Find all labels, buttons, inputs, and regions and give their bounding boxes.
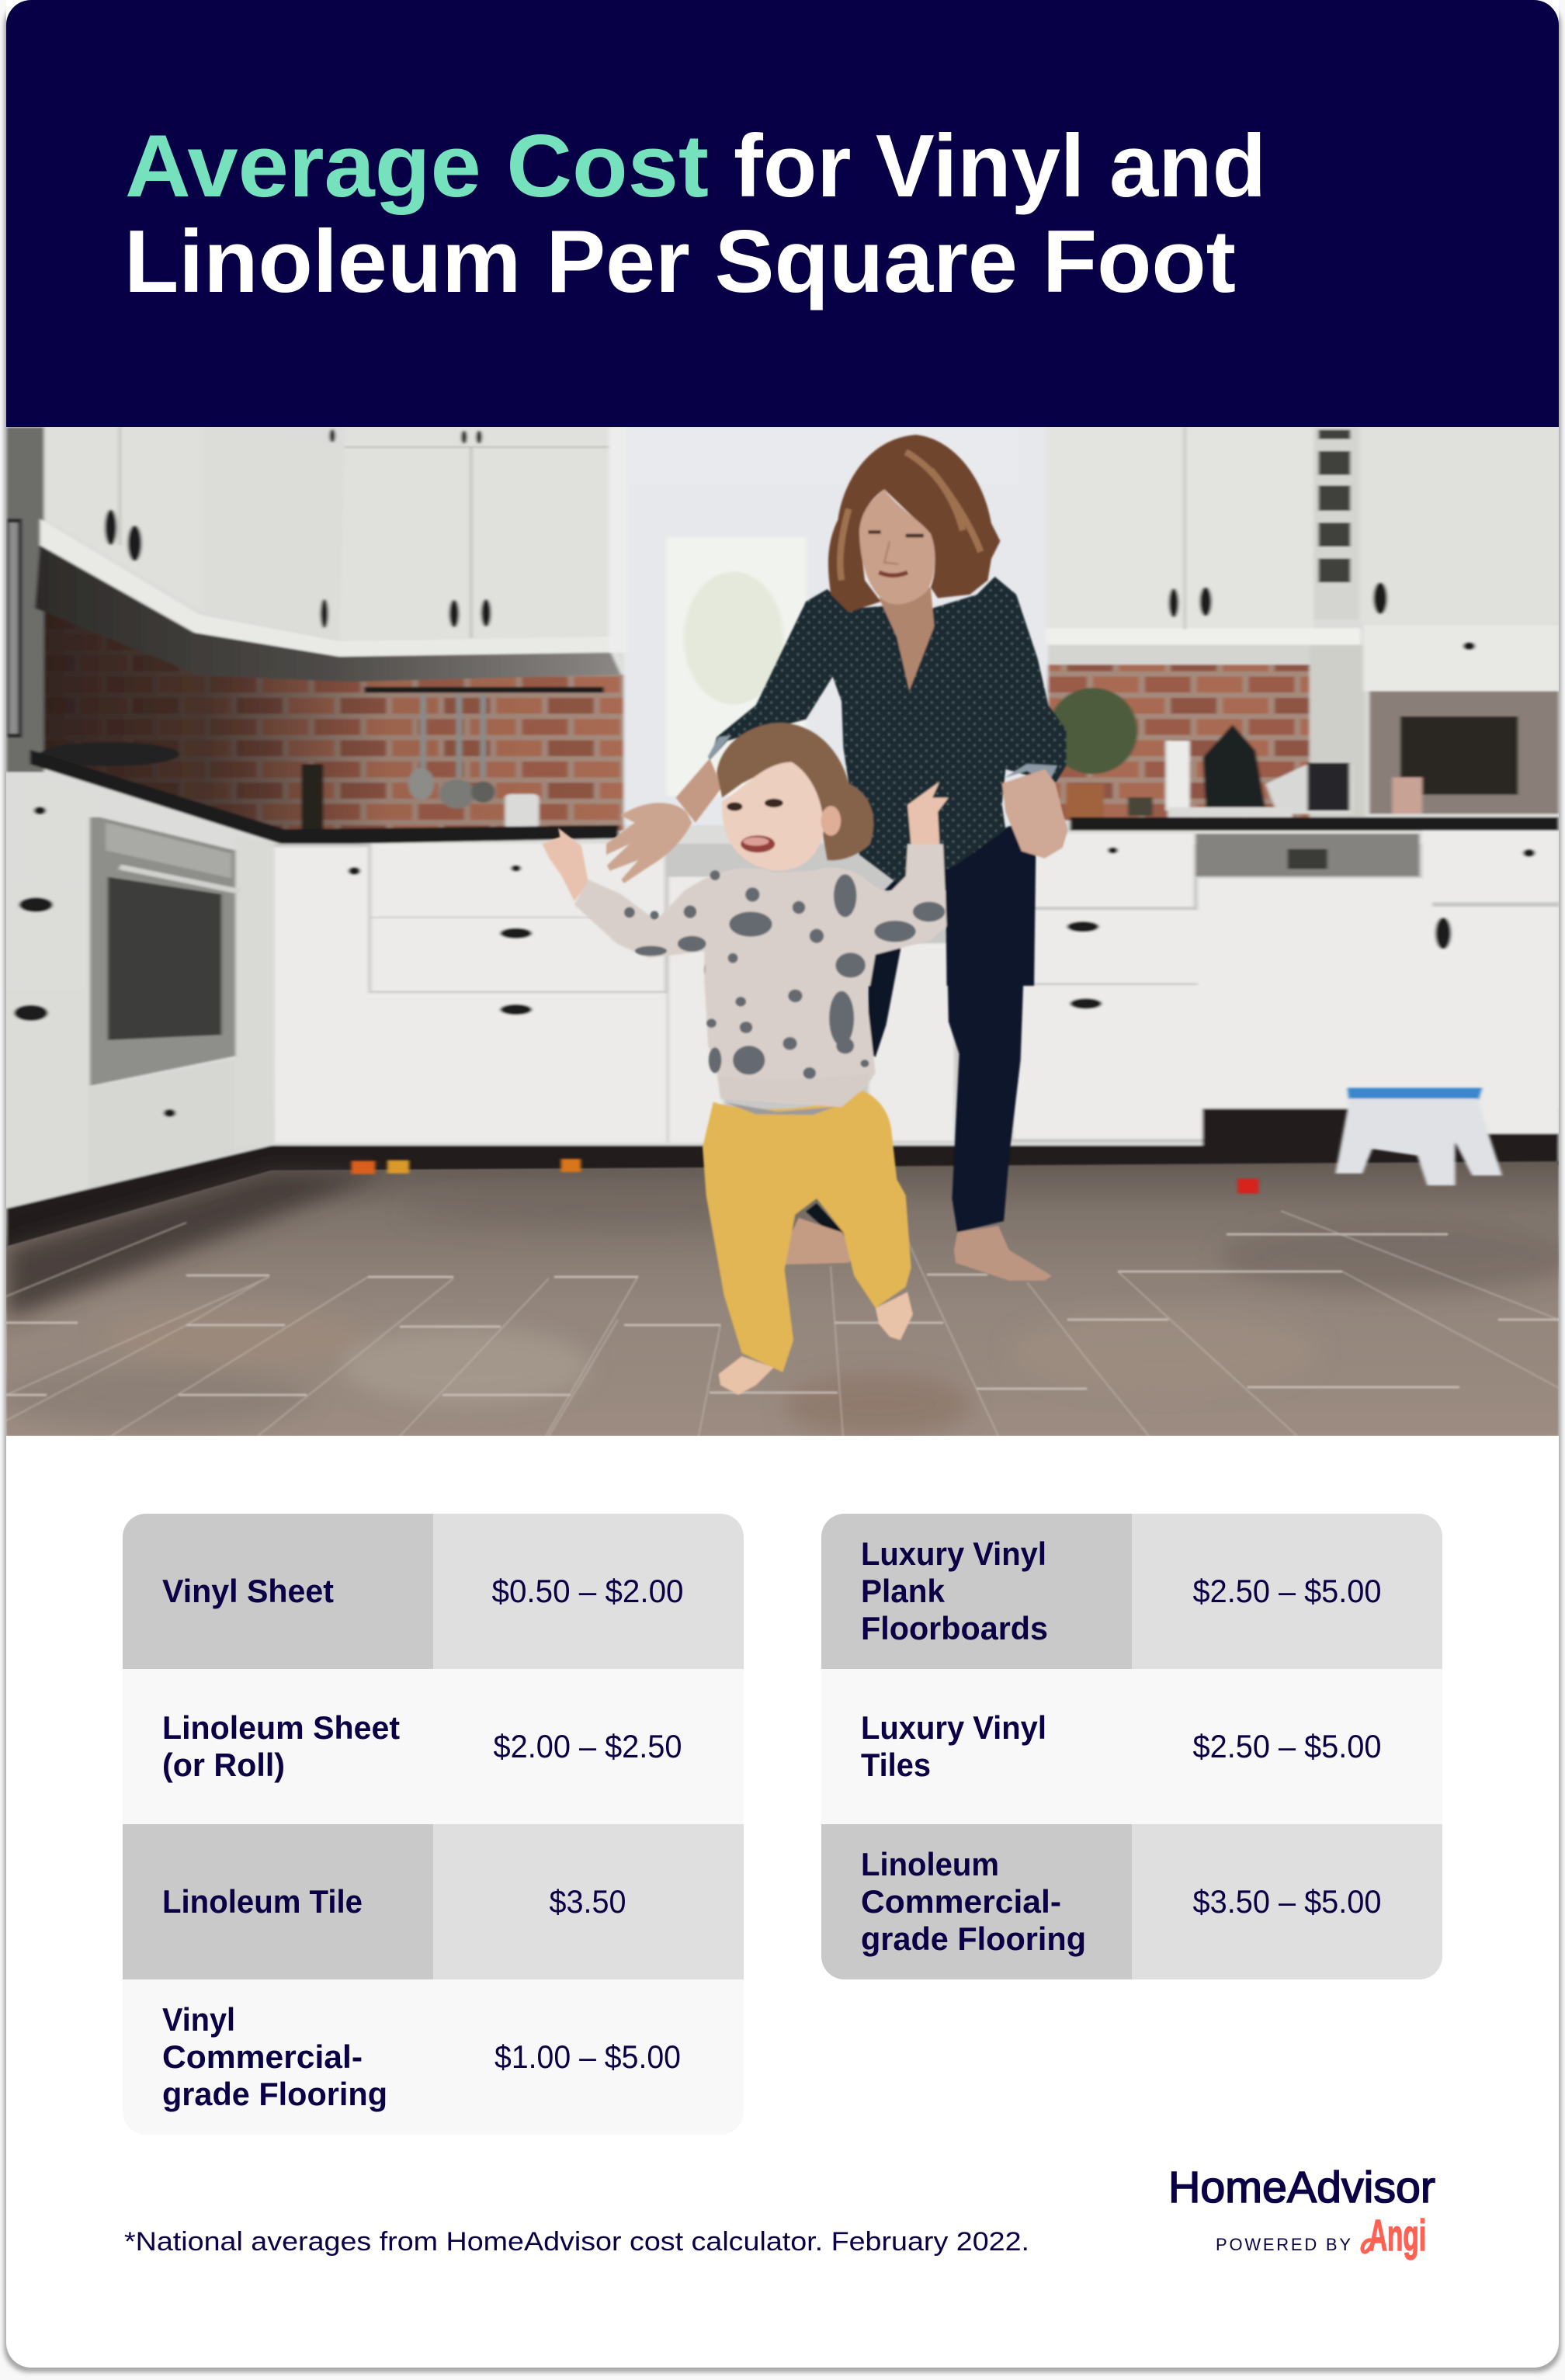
row: linoleum commercial-grade flooring: $3.50 – $5.00 [1192, 1883, 1382, 1920]
row: linoleum sheet: Linoleum Sheet [162, 1709, 400, 1746]
brick wall [30, 605, 624, 841]
title: for Vinyl and [734, 117, 1266, 216]
row: linoleum tile [162, 1883, 626, 1920]
upper cabinets right [1046, 427, 1313, 630]
row: linoleum commercial-grade flooring: grade Flooring [861, 1920, 1086, 1957]
logo: HomeAdvisor powered by Angi [1168, 2163, 1435, 2260]
woman: hands [606, 803, 692, 883]
utensils rail [364, 686, 604, 693]
base cabinets [22, 774, 100, 886]
base cabinet handles [14, 807, 1535, 1117]
row: vinyl sheet [162, 1573, 683, 1609]
row: vinyl commercial-grade flooring [162, 2001, 681, 2112]
row: luxury vinyl plank floorboards: Plank [861, 1573, 946, 1609]
row: linoleum sheet [162, 1709, 682, 1783]
cost table: left column [123, 1514, 744, 2135]
logo: HomeAdvisor powered by Angi: HomeAdvisor [1168, 2163, 1435, 2212]
row: linoleum commercial-grade flooring [861, 1846, 1382, 1957]
kitchen background [0, 419, 1565, 1459]
fridge edge [6, 427, 44, 772]
footnote: *National averages from HomeAdvisor cost calculator. February 2022. [124, 2227, 1029, 2257]
title [124, 117, 1266, 311]
woman: legs and feet [782, 932, 1052, 1281]
toys and stool [352, 1088, 1502, 1193]
title: Linoleum Per Square Foot [124, 213, 1236, 311]
woman: torso, arms and head [606, 435, 1068, 986]
row: luxury vinyl plank floorboards: $2.50 – $5.00 [1192, 1573, 1382, 1609]
row: vinyl commercial-grade flooring: grade Flooring [162, 2076, 387, 2112]
row: linoleum sheet: $2.00 – $2.50 [494, 1728, 682, 1764]
row: luxury vinyl tiles: $2.50 – $5.00 [1192, 1728, 1382, 1764]
folding stool [1335, 1088, 1502, 1185]
toddler: sweater, arms and head [542, 723, 949, 986]
toddler: pants and feet [703, 932, 913, 1395]
header panel [6, 0, 1559, 427]
row: linoleum commercial-grade flooring: Linoleum [861, 1846, 999, 1882]
row: vinyl sheet: $0.50 – $2.00 [492, 1573, 683, 1609]
upper cabinets left [45, 427, 205, 613]
cost table: right column [821, 1514, 1442, 1979]
Angi wordmark [1362, 2211, 1426, 2260]
row: linoleum tile: $3.50 [550, 1883, 626, 1920]
row: luxury vinyl tiles: Luxury Vinyl [861, 1709, 1046, 1746]
row: luxury vinyl plank floorboards [861, 1535, 1382, 1646]
logo: HomeAdvisor powered by Angi: POWERED BY [1216, 2235, 1351, 2254]
row: luxury vinyl tiles [861, 1709, 1382, 1783]
countertop items right [1166, 741, 1190, 810]
people [542, 435, 1068, 1395]
wood plank floor [0, 1161, 1565, 1436]
dishwasher control panel [1195, 834, 1419, 876]
row: linoleum tile: Linoleum Tile [162, 1883, 363, 1920]
microwave [1369, 691, 1559, 814]
row: luxury vinyl plank floorboards: Floorboards [861, 1610, 1048, 1646]
wall and window [624, 427, 1048, 825]
row: luxury vinyl plank floorboards: Luxury Vinyl [861, 1535, 1046, 1572]
row: linoleum commercial-grade flooring: Commercial- [861, 1883, 1061, 1920]
upper cabinet handles [105, 429, 1475, 650]
countertops [30, 750, 619, 845]
row: vinyl commercial-grade flooring: $1.00 – $5.00 [494, 2038, 681, 2075]
oven [90, 817, 235, 1086]
row: linoleum sheet: (or Roll) [162, 1747, 285, 1783]
baseboard [6, 1109, 1559, 1248]
row: vinyl sheet: Vinyl Sheet [162, 1573, 334, 1609]
row: vinyl commercial-grade flooring: Vinyl [162, 2001, 235, 2038]
row: vinyl commercial-grade flooring: Commercial- [162, 2038, 363, 2075]
title: Average Cost [125, 117, 709, 216]
row: luxury vinyl tiles: Tiles [861, 1747, 931, 1783]
photo: mother helping toddler walk across a kitchen floor [0, 419, 1565, 1459]
Angi wordmark: Angi [1369, 2211, 1426, 2260]
toys on floor [352, 1161, 375, 1174]
